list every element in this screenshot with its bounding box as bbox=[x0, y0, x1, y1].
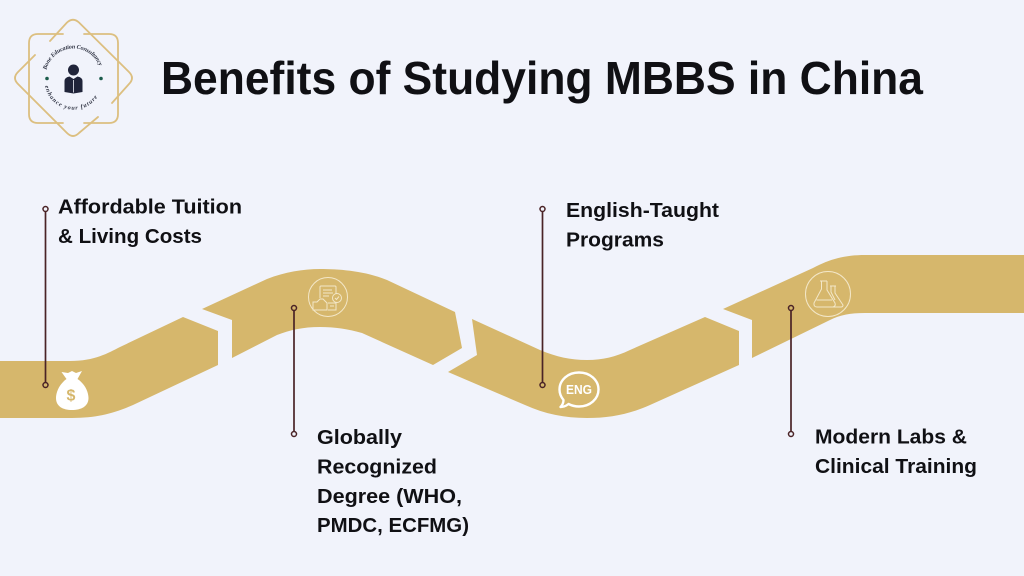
text: modern labs bbox=[815, 426, 977, 478]
logo circular text bbox=[42, 44, 102, 110]
text: affordable tuition: & Living Costs bbox=[58, 225, 202, 248]
winding ribbon bbox=[0, 255, 1024, 418]
text: affordable tuition: Affordable Tuition bbox=[58, 196, 242, 218]
ribbon segment 4 bbox=[723, 255, 1024, 358]
icon: money bag: $ bbox=[67, 388, 76, 404]
text: modern labs: Modern Labs & bbox=[815, 426, 967, 448]
connector: item 4 bbox=[788, 306, 794, 436]
connector: item 3 bbox=[540, 206, 545, 388]
text: english-taught programs: English-Taught bbox=[566, 199, 719, 222]
text: globally recognized degree: Recognized bbox=[317, 456, 437, 478]
connector: item 1 bbox=[43, 206, 48, 388]
ribbon segment 1 bbox=[0, 317, 218, 418]
text: globally recognized degree bbox=[317, 426, 469, 537]
text: globally recognized degree: Globally bbox=[317, 426, 403, 449]
text: modern labs: Clinical Training bbox=[815, 455, 977, 478]
icon: certificate document bbox=[308, 278, 348, 316]
text: affordable tuition bbox=[58, 196, 242, 248]
icon: ENG speech bubble: ENG bbox=[566, 383, 592, 397]
title: Benefits of Studying MBBS in China bbox=[161, 52, 923, 104]
text: globally recognized degree: Degree (WHO, bbox=[317, 485, 462, 508]
logo bbox=[14, 18, 133, 137]
text: globally recognized degree: PMDC, ECFMG) bbox=[317, 514, 469, 537]
ribbon segment 2 bbox=[202, 269, 462, 365]
icon: money bag bbox=[56, 371, 88, 410]
logo dots bbox=[45, 77, 103, 80]
logo frame: star of two squares bbox=[15, 20, 132, 136]
connector: item 2 bbox=[292, 306, 296, 436]
icon: ENG speech bubble bbox=[560, 372, 598, 407]
ribbon segment 3 bbox=[448, 317, 739, 418]
text: english-taught programs bbox=[566, 199, 719, 252]
logo circular text: enhance your future bbox=[45, 86, 97, 110]
text: english-taught programs: Programs bbox=[566, 228, 664, 252]
logo reader icon bbox=[64, 64, 82, 94]
logo circular text: Bone Education Consultancy bbox=[42, 44, 102, 70]
icon: lab flasks bbox=[806, 272, 850, 316]
